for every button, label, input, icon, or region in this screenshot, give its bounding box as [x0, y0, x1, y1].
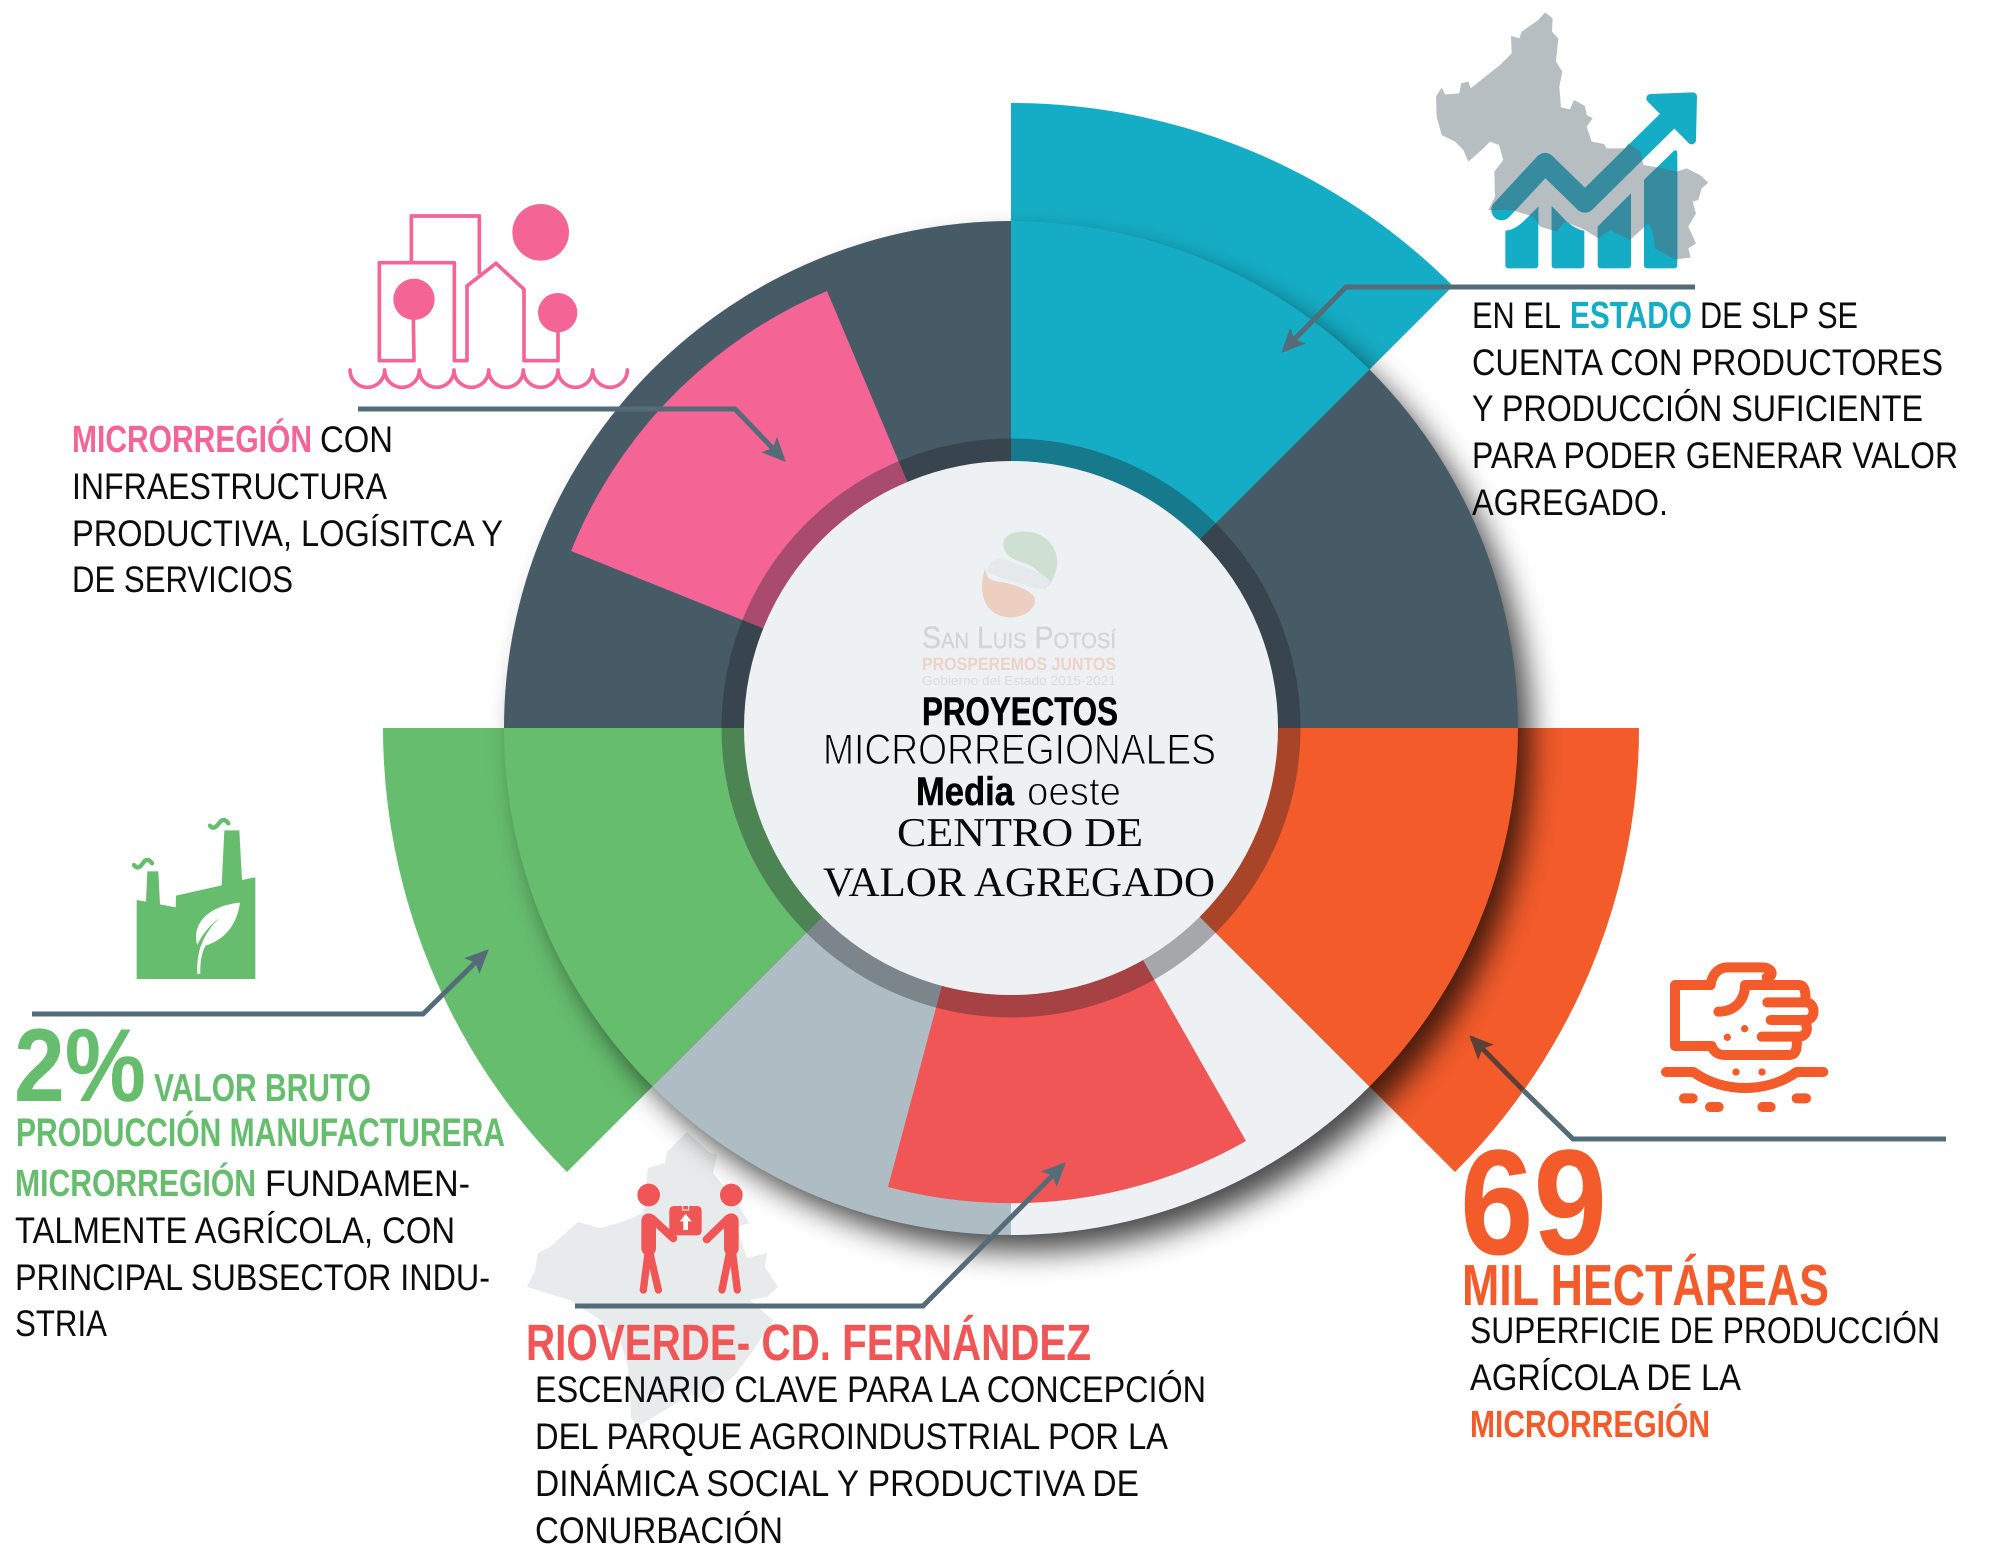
text block: hectares: [1460, 1118, 1940, 1446]
title: Proyectos: PROYECTOS: [922, 690, 1118, 734]
icon: factory with leaf: [134, 820, 255, 979]
line on white: [1523, 1090, 1946, 1139]
logo: San Luis Potosí: [922, 531, 1117, 688]
inner sector: teal: [1011, 221, 1370, 728]
seeds: [1724, 1025, 1766, 1076]
logo name: San Luis Potosí: [922, 620, 1117, 655]
body line 3: PRODUCTIVA, LOGÍSITCA Y: [72, 513, 503, 554]
map of San Luis Potosí state with growth chart icon: [1436, 12, 1708, 268]
highlight: microrregión: MICRORREGIÓN: [1470, 1403, 1710, 1446]
box: [669, 1206, 702, 1235]
disc drop shadow: [521, 241, 1531, 1251]
body line 5: AGREGADO.: [1472, 482, 1668, 523]
body line 1 end: DE SLP SE: [1700, 295, 1858, 336]
leaf: [196, 903, 240, 974]
stat label: MIL HECTÁREAS: [1462, 1253, 1829, 1318]
inner sector: red: [888, 728, 1246, 1203]
title block: [823, 690, 1216, 906]
city outline: [350, 216, 627, 387]
arrow: red connector: [575, 1165, 1063, 1306]
body line 1 start: EN EL: [1472, 295, 1561, 336]
body line 3: PRINCIPAL SUBSECTOR INDU-: [15, 1257, 490, 1298]
outer sector: teal: [1011, 103, 1453, 728]
icon: bars and rising arrow: [1502, 97, 1693, 268]
centre circle: [744, 461, 1278, 995]
smoke: [134, 820, 228, 867]
body line 3: DINÁMICA SOCIAL Y PRODUCTIVA DE: [535, 1463, 1139, 1504]
highlight: microrregión: MICRORREGIÓN: [72, 418, 312, 461]
body line 4: DE SERVICIOS: [72, 559, 293, 600]
arrow: pink connector: [358, 409, 783, 459]
arrow: orange connector: [1472, 1038, 1946, 1139]
inner sector: pink: [571, 291, 1011, 728]
logo mark: [982, 531, 1057, 617]
arrow: green connector: [32, 952, 486, 1014]
title: Centro de: CENTRO DE: [897, 809, 1143, 855]
icon overlap tint: [1491, 144, 1678, 260]
text block: infrastructure: [72, 418, 503, 600]
icon: hand over soil: [1666, 967, 1823, 1107]
state map silhouette: [1436, 12, 1708, 259]
body line 2: AGRÍCOLA DE LA: [1470, 1357, 1741, 1398]
arrow: teal connector: [1284, 287, 1695, 350]
body line 1: FUNDAMEN-: [265, 1163, 470, 1204]
heading: RIOVERDE- CD. FERNÁNDEZ: [526, 1314, 1091, 1371]
logo slogan: PROSPEREMOS JUNTOS: [922, 654, 1116, 674]
stat: 2%: 2%: [14, 1008, 146, 1124]
map: Rioverde microregion (faint): [527, 1132, 778, 1425]
trees and sun: [393, 204, 577, 332]
body line 2: DEL PARQUE AGROINDUSTRIAL POR LA: [535, 1416, 1168, 1457]
highlight: microrregión: MICRORREGIÓN: [15, 1162, 256, 1205]
body line 1: ESCENARIO CLAVE PARA LA CONCEPCIÓN: [535, 1369, 1206, 1410]
icon: city with trees: [350, 204, 627, 387]
highlight: estado: ESTADO: [1570, 295, 1692, 337]
text block: manufacturing: [14, 1008, 505, 1344]
text block: Rioverde: [526, 1314, 1206, 1551]
stat: 69: 69: [1460, 1118, 1607, 1286]
body line 4: STRIA: [15, 1303, 107, 1344]
translucent ring: [733, 450, 1289, 1006]
title: Valor agregado: VALOR AGREGADO: [823, 860, 1215, 906]
soil: [1666, 1072, 1823, 1107]
body line 3: Y PRODUCCIÓN SUFICIENTE: [1472, 388, 1923, 429]
body line 1: CON: [320, 419, 393, 460]
stat label: producción manufacturera: PRODUCCIÓN MANUFACTURERA: [16, 1110, 505, 1155]
thumb and fingers: [1718, 985, 1814, 1037]
left person: [637, 1184, 673, 1290]
disc: lower right light segment: [1011, 728, 1370, 1235]
outer sector: orange: [1011, 728, 1639, 1172]
body line 2: TALMENTE AGRÍCOLA, CON: [15, 1210, 455, 1251]
disc: lower left blue-grey segment: [652, 728, 1011, 1235]
hand outline: [1675, 967, 1797, 1055]
body line 2: CUENTA CON PRODUCTORES: [1472, 342, 1943, 383]
body line 4: CONURBACIÓN: [535, 1510, 783, 1551]
inner sector: orange: [1011, 728, 1518, 1086]
stat label: valor bruto: VALOR BRUTO: [154, 1067, 371, 1110]
title: Microrregionales: MICRORREGIONALES: [823, 726, 1216, 774]
logo subtitle: Gobierno del Estado 2015-2021: [922, 673, 1116, 688]
title: oeste: oeste: [1027, 770, 1121, 814]
outer sector: green: [383, 728, 1011, 1172]
central disc: [504, 221, 1518, 1235]
inner sector: green: [504, 728, 1011, 1086]
right person: [707, 1184, 743, 1290]
text block: state producers: [1472, 295, 1958, 523]
icon: people exchanging a box: [637, 1184, 743, 1290]
arrow over orange: [1472, 1038, 1523, 1090]
title: Media: Media: [916, 770, 1015, 814]
body line 2: INFRAESTRUCTURA: [72, 466, 387, 507]
factory silhouette: [137, 830, 255, 979]
disc: dark upper half: [504, 221, 1518, 728]
